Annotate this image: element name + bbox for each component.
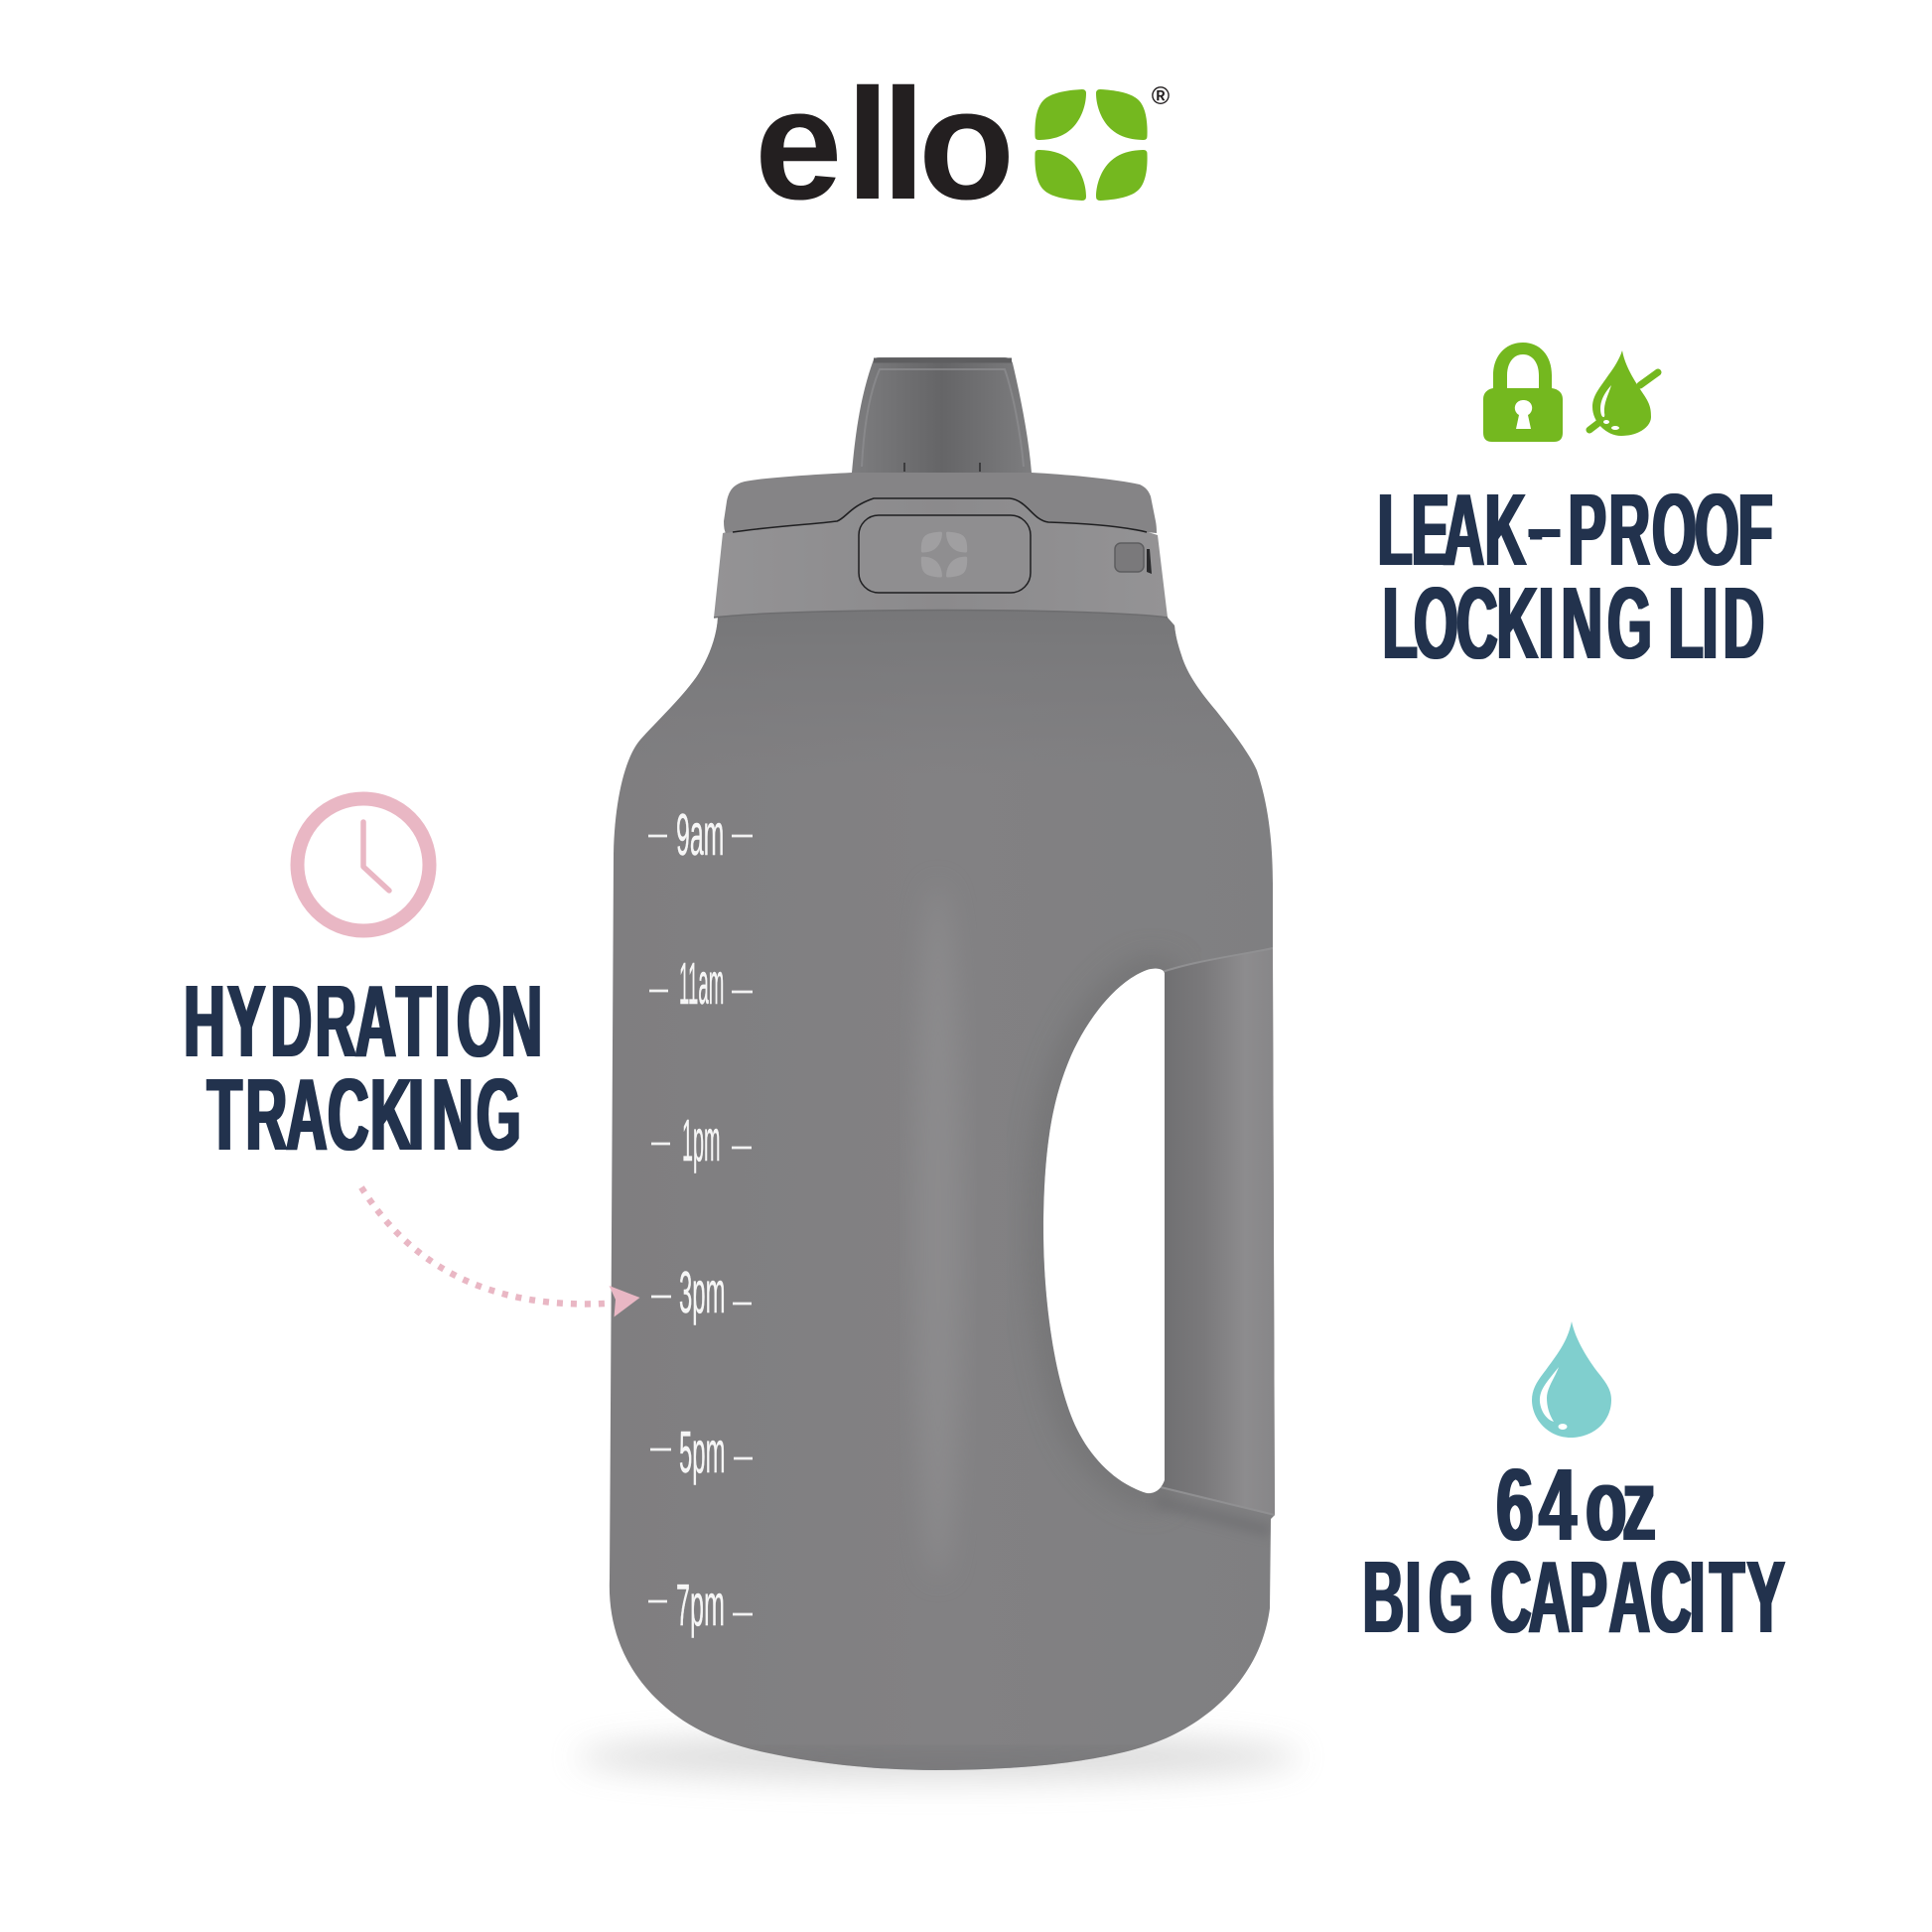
spout [852,357,1032,473]
feature: hydration tracking [184,798,639,1316]
lid top [724,473,1157,533]
infographic canvas [186,83,1785,1791]
heading: 64oz big capacity: BIG CAPACITY [1363,1539,1785,1654]
feature: leak-proof locking lid [1378,343,1773,680]
heading: 64oz big capacity [1363,1449,1785,1654]
lid band [714,496,1168,618]
feature: 64oz big capacity [1363,1321,1785,1654]
marking: 11am [649,952,753,1017]
icon: clock [298,798,429,931]
marking: 3pm: 3pm [679,1261,726,1325]
marking: 11am: 11am [679,952,724,1017]
side lock tab [1115,543,1152,574]
registered mark: ® [1152,82,1171,110]
logo: ello: ello [755,56,1015,232]
time markings [648,803,753,1638]
lid button [859,515,1031,593]
ground shadow [576,1733,1301,1781]
marking: 9am [648,803,753,868]
marking: 7pm [648,1574,753,1638]
icon: water drop [1532,1321,1611,1438]
bottle [576,357,1301,1787]
marking: 5pm [650,1421,753,1485]
marking: 1pm [651,1109,752,1173]
heading: hydration tracking: HYDRATION [184,963,542,1078]
heading: hydration tracking: TRACKING [207,1056,521,1172]
marking: 1pm: 1pm [682,1109,720,1173]
heading: leak-proof locking lid: PROOF [1568,472,1773,587]
heading: leak-proof locking lid [1378,472,1773,680]
logo: ello [755,56,1171,232]
heading: 64oz big capacity: 64oz [1496,1449,1656,1562]
lid seam line [733,498,1147,532]
icon: embossed leaf mark [921,532,967,578]
marking: 3pm [651,1261,752,1325]
marking: 7pm: 7pm [676,1574,725,1638]
handle grip [1157,948,1275,1515]
heading: hydration tracking [184,963,542,1172]
marking: 9am: 9am [676,803,724,868]
bottle body [586,596,1301,1787]
hyphen extension [1530,529,1559,537]
icon: no-leak drop [1589,350,1658,436]
marking: 5pm: 5pm [679,1421,726,1485]
heading: leak-proof locking lid: LEAK [1378,472,1526,587]
heading: leak-proof locking lid: LOCKING LID [1382,565,1764,680]
arrow: dotted to 3pm [361,1187,639,1316]
heading: leak-proof locking lid: - [1530,495,1542,567]
icon: green leaf mark [1035,89,1148,201]
icon: padlock [1483,343,1563,442]
